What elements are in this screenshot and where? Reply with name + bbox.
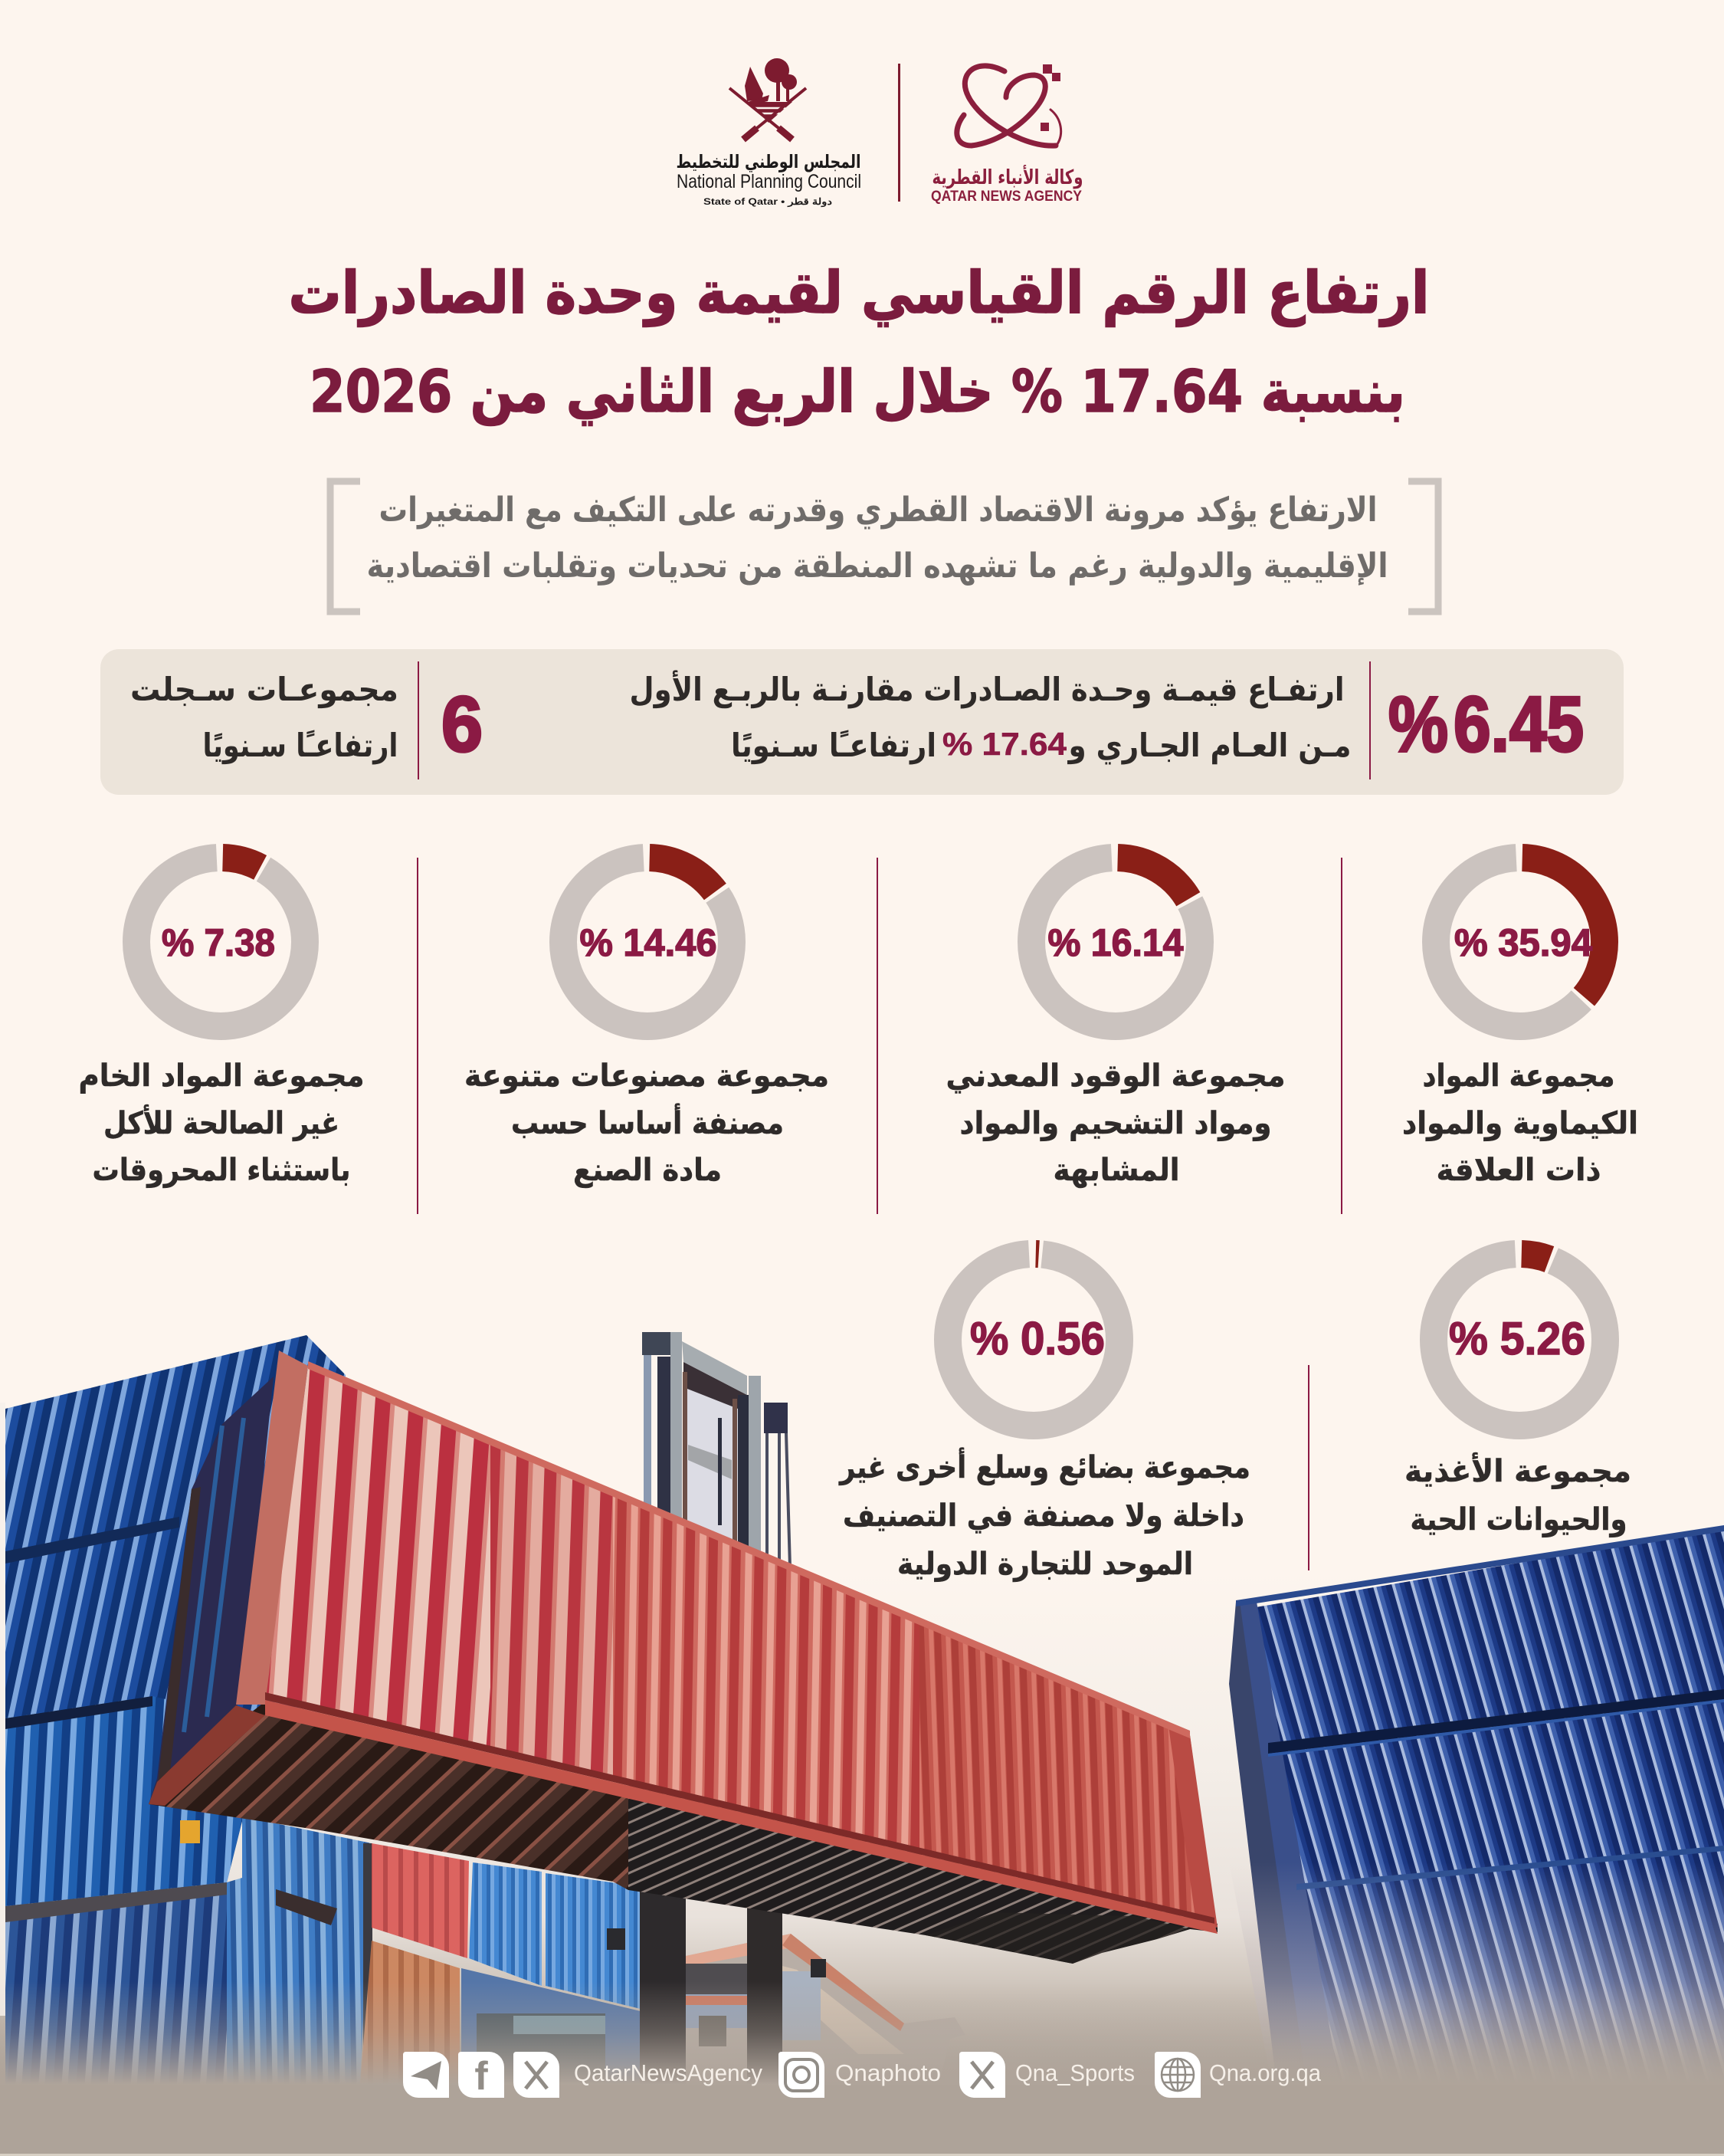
- social footer: [403, 2052, 1322, 2099]
- subtitle with brackets: [330, 481, 1438, 612]
- band text: quarterly rise: [630, 670, 1352, 765]
- donut chart: [1031, 858, 1200, 1026]
- warehouse building: [686, 1934, 965, 2085]
- lower middle containers: [360, 1843, 644, 2085]
- label: مجموعة مصنوعات متنوعة: [464, 1058, 829, 1094]
- donut chart: [1436, 858, 1604, 1026]
- icon: facebook: [458, 2052, 504, 2099]
- forklift mast: [607, 1332, 826, 2085]
- label: غير الصالحة للأكل: [103, 1104, 339, 1141]
- panel: mineral fuels 16.14: [946, 858, 1286, 1188]
- label: مجموعة المواد الخام: [78, 1058, 365, 1094]
- panel: food and live animals 5.26: [1404, 1254, 1631, 1537]
- emblem: dhow, palm and crossed swords: [729, 58, 806, 139]
- band text: quarterly rise: مـن العـام الجـاري و: [1067, 727, 1352, 765]
- donut chart: [1434, 1254, 1605, 1426]
- band text: six groups: ارتفاعـًا سـنويًا: [202, 727, 398, 765]
- label: مجموعة الوقود المعدني: [946, 1058, 1286, 1094]
- label: [1404, 1452, 1631, 1537]
- raised red container: [149, 1350, 1218, 1964]
- figure: 6 groups: 6: [441, 681, 483, 768]
- value: 7.38 %: [162, 921, 275, 964]
- icon: X sports: [959, 2052, 1005, 2098]
- panel: chemicals 35.94: [1402, 858, 1638, 1188]
- band text: six groups: مجموعـات سـجلت: [130, 671, 398, 709]
- English name: National Planning Council: [677, 171, 861, 192]
- subtitle with brackets: الإقليمية والدولية رغم ما تشهده المنطقة من تحديات وتقلبات اقتصادية: [366, 546, 1388, 586]
- photo: container yard: [0, 1332, 1724, 2156]
- value: 14.46 %: [579, 921, 717, 964]
- value: 5.26 %: [1449, 1313, 1585, 1364]
- container underside: [149, 1702, 628, 1890]
- QNA symbol: [957, 66, 1061, 146]
- door end: [149, 1377, 274, 1806]
- logo divider: [898, 64, 900, 202]
- label: داخلة ولا مصنفة في التصنيف: [843, 1498, 1244, 1534]
- band text: six groups: [130, 671, 398, 765]
- band text: quarterly rise: 17.64 %: [942, 726, 1067, 762]
- band text: quarterly rise: ارتفاعـًا سـنويًا: [731, 727, 936, 765]
- donut chart: [563, 858, 732, 1026]
- label: الكيماوية والمواد: [1402, 1106, 1638, 1141]
- label: ذات العلاقة: [1436, 1153, 1601, 1188]
- label: [78, 1058, 365, 1188]
- logo: Qatar News Agency: [931, 64, 1083, 205]
- icon: X: [513, 2052, 559, 2098]
- title: ارتفاع الرقم القياسي لقيمة وحدة الصادرات: [288, 258, 1430, 327]
- state line: State of Qatar • دولة قطر: [703, 196, 832, 208]
- corner post: [236, 1350, 308, 1705]
- band divider right: [1369, 661, 1371, 779]
- panel: crude materials 7.38: [78, 858, 365, 1188]
- band divider left: [418, 661, 419, 779]
- title: [288, 258, 1430, 426]
- bottom fade: [0, 1981, 1724, 2085]
- label: والحيوانات الحية: [1410, 1502, 1627, 1537]
- icon: telegram: [403, 2052, 449, 2098]
- key figures band: [100, 649, 1624, 795]
- label: مصنفة أساسا حسب: [511, 1103, 784, 1141]
- donut chart: [136, 858, 305, 1026]
- value: 0.56 %: [970, 1313, 1105, 1364]
- left blue container stack: [5, 1335, 372, 2085]
- label: [1402, 1058, 1638, 1188]
- container side: [265, 1366, 490, 1748]
- label: [838, 1447, 1250, 1582]
- lower beam: [265, 1692, 1214, 1924]
- label: مادة الصنع: [573, 1153, 722, 1188]
- label: الموحد للتجارة الدولية: [897, 1547, 1193, 1582]
- label: مجموعة الأغذية: [1404, 1452, 1631, 1489]
- donut chart: [948, 1254, 1119, 1426]
- label: [946, 1058, 1286, 1188]
- panel: other goods 0.56: [838, 1254, 1250, 1582]
- icon: instagram: [778, 2052, 824, 2098]
- handle: Qnaphoto: Qnaphoto: [835, 2059, 941, 2086]
- column dividers row one: [417, 858, 1342, 1214]
- right blue container stack: [1229, 1525, 1724, 2085]
- label: المشابهة: [1053, 1153, 1180, 1188]
- icon: globe: [1155, 2052, 1201, 2098]
- panel: manufactured articles 14.46: [464, 858, 829, 1188]
- figure: 6.45 percent: [1388, 681, 1584, 768]
- label: مجموعة المواد: [1422, 1058, 1615, 1094]
- band text: quarterly rise: ارتفـاع قيمـة وحـدة الصـادرات مقارنـة بالربـع الأول: [630, 670, 1344, 709]
- logos header: [676, 58, 1083, 208]
- value: 35.94 %: [1454, 921, 1592, 964]
- figure: 6.45 percent: %: [1388, 681, 1448, 768]
- logo: National Planning Council: [676, 58, 861, 208]
- icon: facebook: f: [474, 2054, 488, 2099]
- handle: Qna.org.qa: Qna.org.qa: [1209, 2059, 1322, 2086]
- title: بنسبة 17.64 % خلال الربع الثاني من 2026: [310, 357, 1405, 426]
- column divider row two: [1308, 1365, 1309, 1570]
- label: باستثناء المحروقات: [92, 1153, 351, 1188]
- label: مجموعة بضائع وسلع أخرى غير: [838, 1447, 1250, 1485]
- label: ومواد التشحيم والمواد: [959, 1106, 1272, 1141]
- English agency name: QATAR NEWS AGENCY: [931, 189, 1082, 205]
- figure: 6.45 percent: 6.45: [1454, 681, 1584, 768]
- label: [464, 1058, 829, 1188]
- Arabic name: المجلس الوطني للتخطيط: [676, 151, 861, 172]
- value: 16.14 %: [1048, 921, 1184, 964]
- handle: Qna_Sports: Qna_Sports: [1015, 2059, 1135, 2086]
- handle: QatarNewsAgency: QatarNewsAgency: [574, 2059, 762, 2086]
- Arabic agency name: وكالة الأنباء القطرية: [932, 165, 1083, 189]
- subtitle with brackets: الارتفاع يؤكد مرونة الاقتصاد القطري وقدرته على التكيف مع المتغيرات: [379, 491, 1378, 530]
